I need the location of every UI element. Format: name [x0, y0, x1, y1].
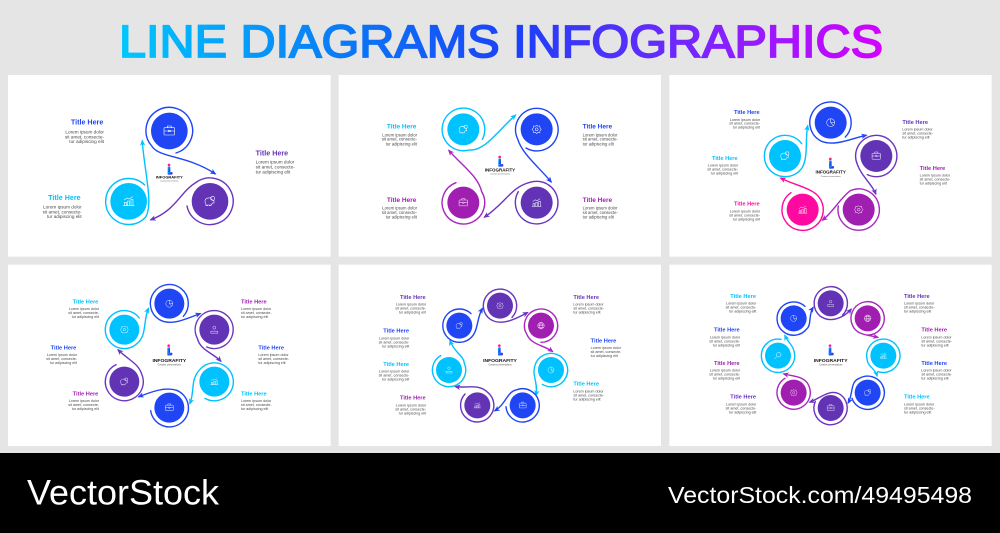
step: blue briefcase node — [139, 389, 188, 427]
step: purple piggy node — [105, 350, 143, 401]
text: magenta right: Title Here — [921, 328, 947, 334]
text: magenta bottom left: sit amet, consecte- — [68, 403, 100, 407]
text: purple top right: sit amet, consecte- — [904, 306, 935, 310]
center logo — [152, 344, 187, 366]
text: cyan left — [379, 362, 410, 382]
text: purple step: Lorem ipsum dolor — [902, 128, 933, 132]
text: magenta bottom left: Lorem ipsum dolor — [69, 399, 100, 403]
text: magenta left step — [382, 197, 418, 220]
text: cyan top left — [726, 294, 757, 314]
step: magenta globe node — [851, 302, 884, 337]
text: magenta left: sit amet, consecte- — [709, 373, 741, 377]
text: blue step: sit amet, consecte- — [65, 134, 104, 139]
text: blue left — [709, 328, 741, 347]
text: cyan top left: Lorem ipsum dolor — [726, 302, 757, 306]
text: purple bottom left: sit amet, consecte- — [726, 406, 757, 410]
text: cyan top left: Title Here — [73, 300, 98, 306]
step: blue briefcase node — [495, 389, 539, 422]
text: magenta top right: sit amet, consecte- — [241, 311, 272, 315]
text: blue step: Title Here — [71, 119, 103, 127]
center logo: INFOGRAFITY — [815, 170, 846, 175]
text: cyan step — [382, 124, 418, 146]
text: cyan right: Title Here — [573, 382, 599, 388]
text: cyan step: Title Here — [387, 124, 417, 131]
text: cyan bottom right: tur adipiscing elit — [241, 407, 268, 411]
text: purple top right: tur adipiscing elit — [904, 310, 931, 314]
text: cyan step: sit amet, consecte- — [382, 137, 418, 142]
text: blue step — [729, 110, 761, 130]
panel: five-step cycle — [669, 75, 992, 257]
text: cyan bottom right: Title Here — [241, 391, 267, 397]
text: cyan right — [573, 382, 605, 401]
step: blue piggy node — [443, 309, 482, 342]
center logo: Creative presentations — [821, 175, 841, 178]
text: magenta right step: tur adipiscing elit — [583, 215, 615, 220]
center logo — [485, 156, 515, 176]
step: magenta globe node — [524, 309, 558, 351]
step: cyan gear node — [105, 309, 148, 349]
step: cyan user node — [432, 341, 466, 387]
text: purple left: Title Here — [400, 295, 426, 301]
text: blue left: Title Here — [383, 329, 409, 335]
text: purple step: Title Here — [256, 149, 288, 157]
step: cyan piggy node — [442, 108, 515, 151]
text: purple bottom left: Lorem ipsum dolor — [726, 402, 757, 406]
text: blue step: Lorem ipsum dolor — [730, 118, 761, 122]
text: magenta top right: tur adipiscing elit — [241, 315, 268, 319]
text: blue step — [65, 119, 105, 144]
text: magenta left: Lorem ipsum dolor — [396, 403, 427, 407]
text: magenta left: Title Here — [714, 361, 740, 367]
step: purple briefcase node — [856, 135, 897, 194]
text: magenta top right — [241, 300, 272, 319]
text: blue step: Title Here — [734, 110, 760, 116]
step: cyan chart node — [190, 363, 233, 403]
text: cyan bottom right: tur adipiscing elit — [904, 410, 931, 414]
text: cyan top left: sit amet, consecte- — [726, 306, 757, 310]
text: cyan step: Title Here — [48, 194, 81, 202]
text: blue middle right — [258, 345, 290, 365]
footer image url: VectorStock.com/49495498 — [668, 482, 972, 508]
text: cyan step: Title Here — [712, 156, 738, 162]
center logo: Creative presentations — [490, 173, 510, 176]
text: purple top right: Title Here — [904, 294, 930, 300]
text: blue step: sit amet, consecte- — [583, 137, 618, 142]
text: pink step: tur adipiscing elit — [733, 218, 760, 222]
text: purple right: Lorem ipsum dolor — [573, 303, 604, 307]
text: cyan bottom right: Lorem ipsum dolor — [904, 402, 935, 406]
text: magenta left step: tur adipiscing elit — [386, 215, 418, 220]
panel: eight-step cycle — [669, 265, 992, 446]
text: blue step: Lorem ipsum dolor — [65, 129, 104, 134]
text: magenta right: Lorem ipsum dolor — [921, 335, 952, 339]
step: blue pie node — [810, 102, 866, 143]
center logo: Creative presentations — [158, 363, 182, 366]
step: blue pie node — [777, 302, 813, 335]
center logo: Creative presentations — [488, 363, 512, 366]
step: purple chart node — [456, 387, 494, 422]
panel: four-step cycle — [339, 75, 661, 257]
text: blue middle left: Title Here — [51, 345, 76, 351]
step: purple gear node — [483, 289, 527, 322]
text: magenta right: sit amet, consecte- — [921, 339, 953, 343]
text: purple step — [902, 120, 934, 139]
footer brand: VectorStock — [27, 474, 220, 512]
text: purple bottom left: tur adipiscing elit — [729, 410, 756, 414]
step: magenta gear node — [777, 374, 810, 409]
text: blue middle left — [46, 345, 78, 365]
text: blue step: tur adipiscing elit — [733, 126, 760, 130]
step: blue gear node — [515, 108, 558, 182]
text: magenta step: Title Here — [920, 166, 945, 172]
text: magenta bottom left: Title Here — [73, 391, 98, 397]
step: cyan pie node — [534, 353, 568, 395]
text: purple right: Title Here — [573, 295, 599, 301]
text: magenta step: Lorem ipsum dolor — [920, 174, 951, 178]
panel: three-step cycle — [8, 75, 331, 257]
text: magenta right step: sit amet, consecte- — [583, 210, 618, 215]
step: cyan chart node — [867, 339, 900, 376]
text: blue middle right: Lorem ipsum dolor — [258, 353, 289, 357]
text: cyan bottom right: sit amet, consecte- — [904, 406, 935, 410]
text: blue right: Title Here — [591, 338, 616, 344]
text: cyan step: tur adipiscing elit — [711, 172, 738, 176]
step: blue briefcase node — [146, 107, 215, 174]
text: blue middle right: Title Here — [258, 345, 284, 351]
text: purple right — [573, 295, 605, 315]
text: purple step: sit amet, consecte- — [256, 164, 295, 169]
text: blue step: tur adipiscing elit — [583, 141, 615, 146]
text: magenta left — [395, 396, 427, 415]
text: purple bottom left: Title Here — [730, 395, 756, 401]
text: cyan top left: tur adipiscing elit — [72, 315, 99, 319]
step: cyan chart node — [106, 141, 149, 225]
text: magenta left step: Lorem ipsum dolor — [382, 206, 418, 211]
text: blue left: tur adipiscing elit — [713, 343, 740, 347]
text: cyan bottom right: sit amet, consecte- — [241, 403, 272, 407]
footer band — [0, 453, 1000, 533]
text: magenta step: sit amet, consecte- — [920, 178, 951, 182]
step: blue piggy node — [848, 376, 884, 409]
text: cyan bottom right — [241, 391, 272, 411]
text: cyan left: tur adipiscing elit — [382, 378, 409, 382]
text: purple top right: Lorem ipsum dolor — [904, 302, 935, 306]
text: blue left: sit amet, consecte- — [379, 340, 410, 344]
center logo: INFOGRAFITY — [483, 358, 518, 364]
text: blue middle right: tur adipiscing elit — [258, 361, 286, 365]
step: magenta briefcase node — [442, 151, 485, 224]
center logo: INFOGRAFITY — [152, 358, 187, 364]
text: magenta right — [921, 328, 953, 347]
text: cyan left: sit amet, consecte- — [379, 374, 410, 378]
step: magenta gear node — [823, 189, 879, 230]
text: cyan step: sit amet, consecte- — [43, 209, 82, 214]
text: magenta left step: sit amet, consecte- — [382, 210, 418, 215]
text: magenta right step: Lorem ipsum dolor — [583, 206, 618, 211]
text: magenta left: Title Here — [400, 396, 426, 402]
text: magenta right step: Title Here — [583, 197, 612, 204]
text: blue left: Title Here — [714, 328, 740, 334]
center logo — [483, 344, 518, 366]
text: cyan step: tur adipiscing elit — [386, 141, 418, 146]
text: purple step — [256, 149, 295, 174]
center logo: Creative presentations — [819, 363, 843, 366]
text: magenta bottom left: tur adipiscing elit — [72, 407, 99, 411]
text: magenta left: tur adipiscing elit — [399, 411, 426, 415]
text: blue step: Lorem ipsum dolor — [583, 132, 618, 137]
text: cyan bottom right: Lorem ipsum dolor — [241, 399, 272, 403]
text: purple step: Lorem ipsum dolor — [256, 160, 295, 165]
text: blue right: tur adipiscing elit — [921, 377, 949, 381]
text: purple right: tur adipiscing elit — [573, 311, 601, 315]
text: blue left: sit amet, consecte- — [709, 339, 741, 343]
text: blue right: sit amet, consecte- — [591, 350, 622, 354]
title: LINE DIAGRAMS INFOGRAPHICS — [119, 16, 883, 67]
text: cyan right: Lorem ipsum dolor — [573, 389, 604, 393]
text: magenta left — [709, 361, 741, 381]
text: cyan left: Title Here — [383, 362, 409, 368]
step: blue pie node — [150, 285, 200, 322]
text: purple step: sit amet, consecte- — [902, 132, 934, 136]
center logo: INFOGRAFITY — [814, 358, 848, 364]
text: magenta step — [920, 166, 951, 186]
text: purple step: tur adipiscing elit — [256, 169, 291, 174]
text: blue right: sit amet, consecte- — [921, 373, 953, 377]
text: pink step: sit amet, consecte- — [729, 214, 761, 218]
text: purple left: sit amet, consecte- — [395, 307, 427, 311]
text: blue middle right: sit amet, consecte- — [258, 357, 290, 361]
text: blue step — [583, 124, 618, 146]
center logo: Creative presentations — [160, 180, 179, 183]
center logo — [815, 158, 846, 178]
text: purple left — [395, 295, 427, 315]
text: blue right: Lorem ipsum dolor — [921, 369, 952, 373]
text: blue left — [379, 329, 410, 348]
text: cyan right: tur adipiscing elit — [573, 397, 601, 401]
text: blue left: Lorem ipsum dolor — [710, 335, 741, 339]
step: purple briefcase node — [810, 392, 847, 425]
text: blue right: tur adipiscing elit — [591, 354, 618, 358]
text: cyan step — [43, 194, 82, 219]
text: pink step: Lorem ipsum dolor — [730, 210, 761, 214]
text: cyan step: sit amet, consecte- — [707, 168, 739, 172]
text: cyan top left: tur adipiscing elit — [729, 310, 756, 314]
text: magenta left: sit amet, consecte- — [395, 407, 427, 411]
text: cyan step: tur adipiscing elit — [47, 214, 82, 219]
text: cyan top left: sit amet, consecte- — [68, 311, 100, 315]
text: blue middle left: Lorem ipsum dolor — [47, 353, 78, 357]
center logo — [814, 344, 848, 366]
text: magenta top right: Lorem ipsum dolor — [241, 307, 272, 311]
text: cyan step: Lorem ipsum dolor — [382, 132, 418, 137]
center logo — [156, 164, 183, 183]
text: purple right: sit amet, consecte- — [573, 307, 605, 311]
step: cyan search node — [761, 336, 795, 372]
text: cyan bottom right: Title Here — [904, 395, 930, 401]
text: magenta step: tur adipiscing elit — [920, 182, 947, 186]
text: purple step: tur adipiscing elit — [902, 135, 930, 139]
text: blue right — [591, 338, 622, 358]
step: purple user node — [814, 287, 851, 320]
text: cyan right: sit amet, consecte- — [573, 393, 605, 397]
text: magenta top right: Title Here — [241, 300, 267, 306]
text: cyan left: Lorem ipsum dolor — [379, 370, 410, 374]
text: magenta left step: Title Here — [387, 197, 417, 204]
text: magenta bottom left — [68, 391, 100, 411]
text: magenta left: tur adipiscing elit — [713, 377, 740, 381]
text: cyan top left: Lorem ipsum dolor — [69, 307, 100, 311]
text: cyan step: Lorem ipsum dolor — [43, 204, 82, 209]
text: purple bottom left — [726, 395, 757, 414]
text: purple left: tur adipiscing elit — [399, 311, 426, 315]
text: purple top right — [904, 294, 935, 314]
text: blue left: tur adipiscing elit — [382, 344, 409, 348]
panel: seven-step cycle — [339, 265, 661, 446]
text: magenta right step — [583, 197, 618, 220]
text: blue step: tur adipiscing elit — [69, 139, 105, 144]
text: blue middle left: tur adipiscing elit — [50, 361, 77, 365]
text: cyan bottom right — [904, 395, 935, 414]
text: blue right: Lorem ipsum dolor — [591, 346, 622, 350]
step: purple chart node — [485, 181, 558, 224]
text: cyan step — [707, 156, 739, 176]
text: cyan top left: Title Here — [730, 294, 756, 300]
text: blue step: sit amet, consecte- — [729, 122, 761, 126]
text: blue step: Title Here — [583, 124, 612, 131]
text: blue right: Title Here — [921, 361, 947, 367]
text: magenta left: Lorem ipsum dolor — [710, 369, 741, 373]
text: purple left: Lorem ipsum dolor — [396, 303, 427, 307]
panel: six-step cycle — [8, 265, 331, 446]
text: blue left: Lorem ipsum dolor — [379, 336, 410, 340]
text: cyan step: Lorem ipsum dolor — [708, 164, 739, 168]
text: pink step — [729, 202, 761, 222]
step: purple piggy node — [151, 178, 233, 225]
center logo: INFOGRAFITY — [485, 168, 515, 173]
text: magenta right: tur adipiscing elit — [921, 343, 949, 347]
center logo: INFOGRAFITY — [156, 175, 183, 180]
text: cyan top left — [68, 300, 100, 319]
step: cyan piggy node — [764, 126, 808, 177]
step: purple user node — [195, 311, 233, 361]
step: pink chart node — [781, 178, 823, 230]
text: blue middle left: sit amet, consecte- — [46, 357, 78, 361]
text: pink step: Title Here — [734, 202, 760, 208]
text: purple step: Title Here — [902, 120, 928, 126]
text: blue right — [921, 361, 953, 381]
